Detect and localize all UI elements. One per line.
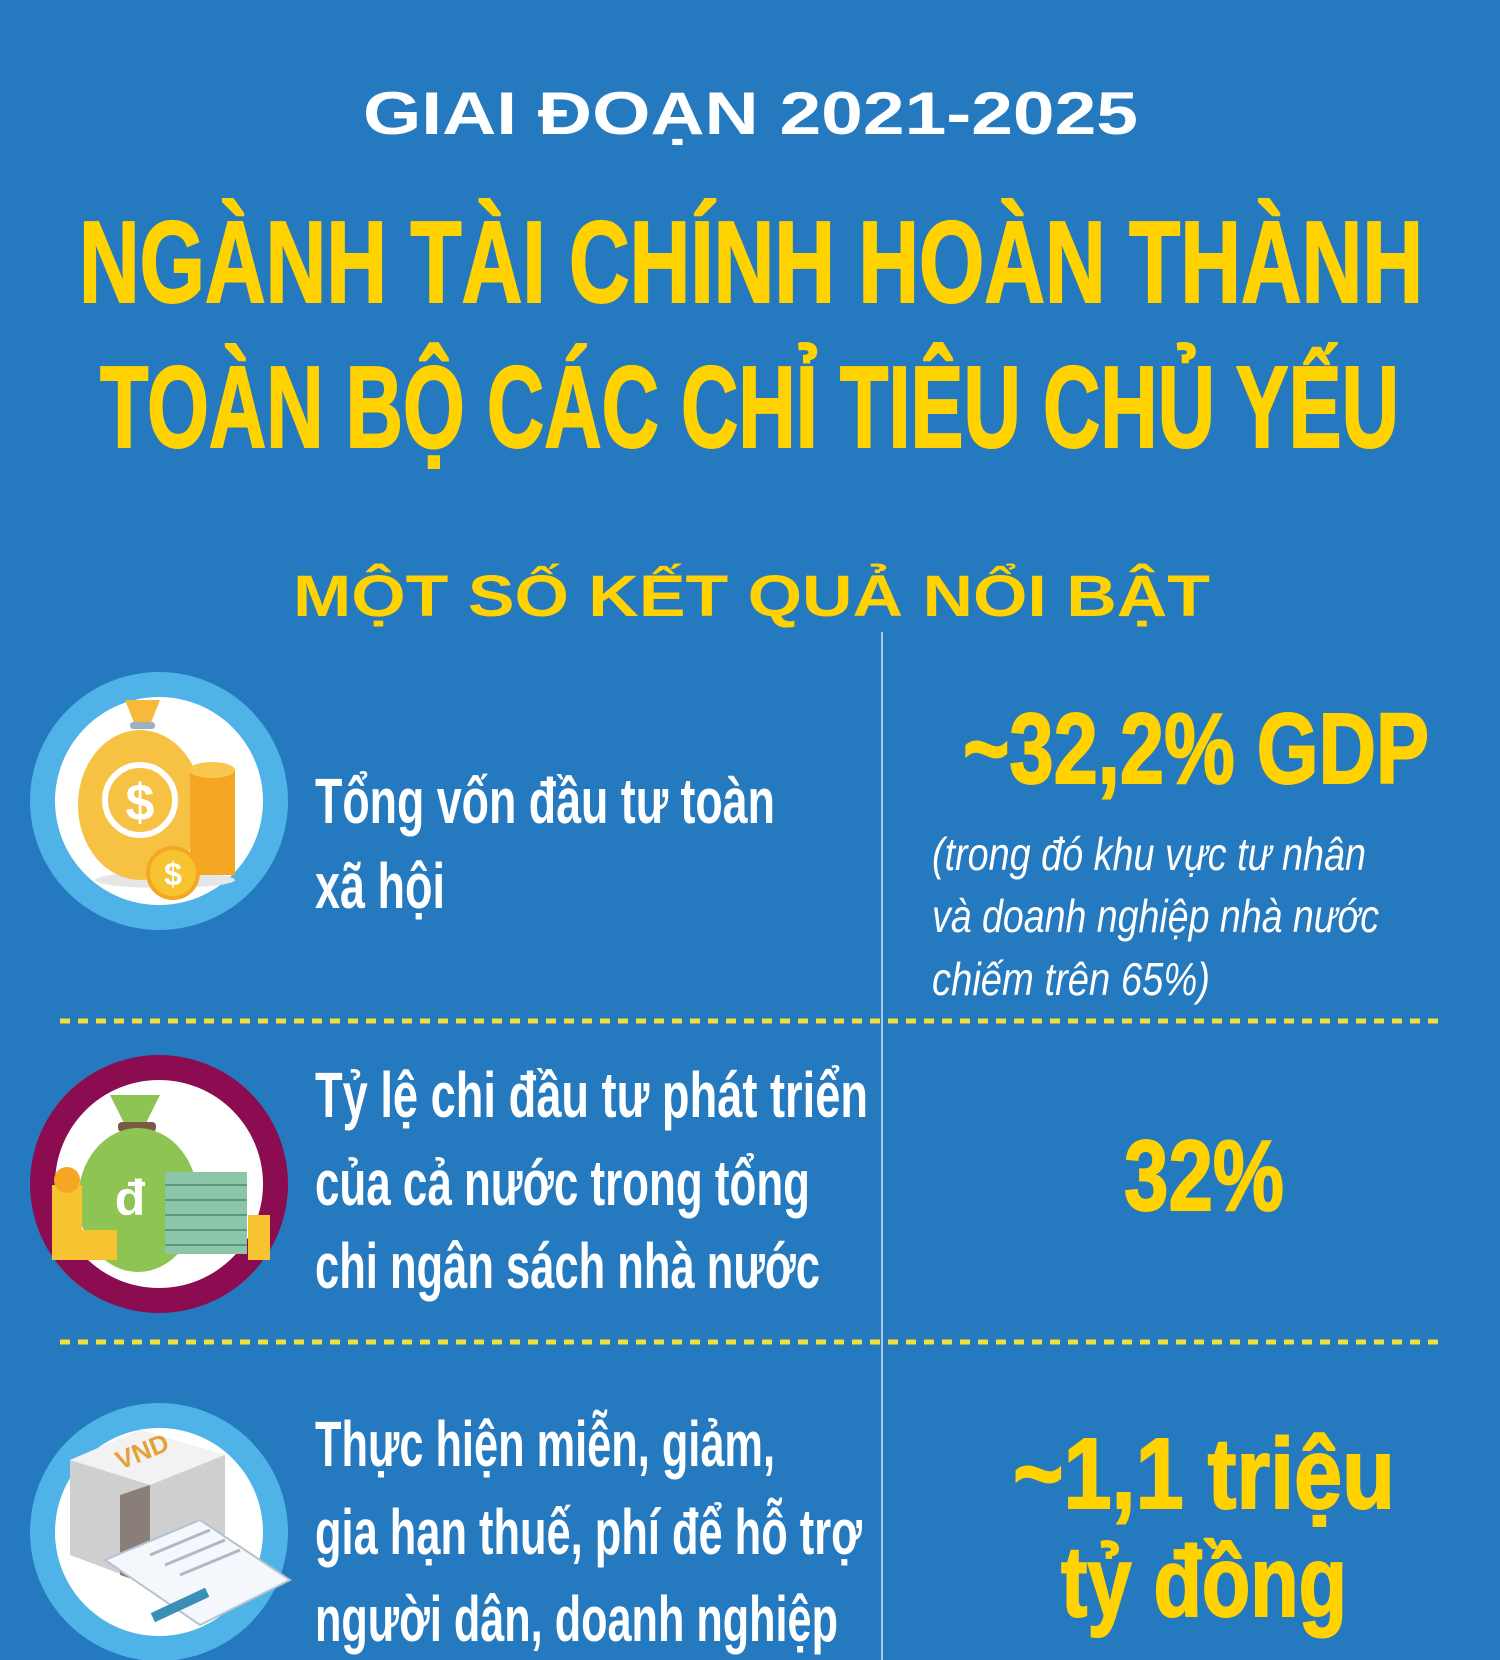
text: row 1 label: xã hội [315,850,445,922]
icon: VND stacks and document: VND [111,1427,173,1476]
value: row 1: (trong đó khu vực tư nhân [932,828,1366,880]
icon: green money bag [30,1055,288,1313]
title [79,197,1423,472]
icon: money bag with coins [30,672,288,930]
value: row 3 [1013,1418,1395,1638]
value: row 2: 32% [1124,1120,1284,1232]
icon: VND stacks and document [30,1403,290,1660]
header: period: GIAI ĐOẠN 2021-2025 [363,80,1138,147]
text: row 3 label [315,1408,862,1655]
value: row 1 [932,693,1429,1005]
text: row 3 label: gia hạn thuế, phí để hỗ trợ [315,1496,862,1568]
text: row 1 label [315,765,775,922]
value: row 1: và doanh nghiệp nhà nước [932,890,1379,942]
text: row 2 label: Tỷ lệ chi đầu tư phát triển [315,1059,868,1131]
value: row 1: chiếm trên 65%) [932,953,1210,1005]
text: row 2 label: chi ngân sách nhà nước [315,1230,820,1302]
text: row 2 label [315,1059,868,1302]
text: row 3 label: Thực hiện miễn, giảm, [315,1408,775,1480]
text: row 3 label: người dân, doanh nghiệp [315,1583,838,1655]
icon: money bag with coins: $ [164,856,182,892]
icon: money bag with coins: $ [126,774,155,832]
value: row 3: ~1,1 triệu [1013,1418,1395,1530]
value: row 3: tỷ đồng [1061,1526,1347,1638]
icon: green money bag: đ [115,1170,146,1226]
subtitle: MỘT SỐ KẾT QUẢ NỔI BẬT [293,564,1210,629]
text: row 2 label: của cả nước trong tổng [315,1147,810,1219]
text: row 1 label: Tổng vốn đầu tư toàn [315,765,775,837]
